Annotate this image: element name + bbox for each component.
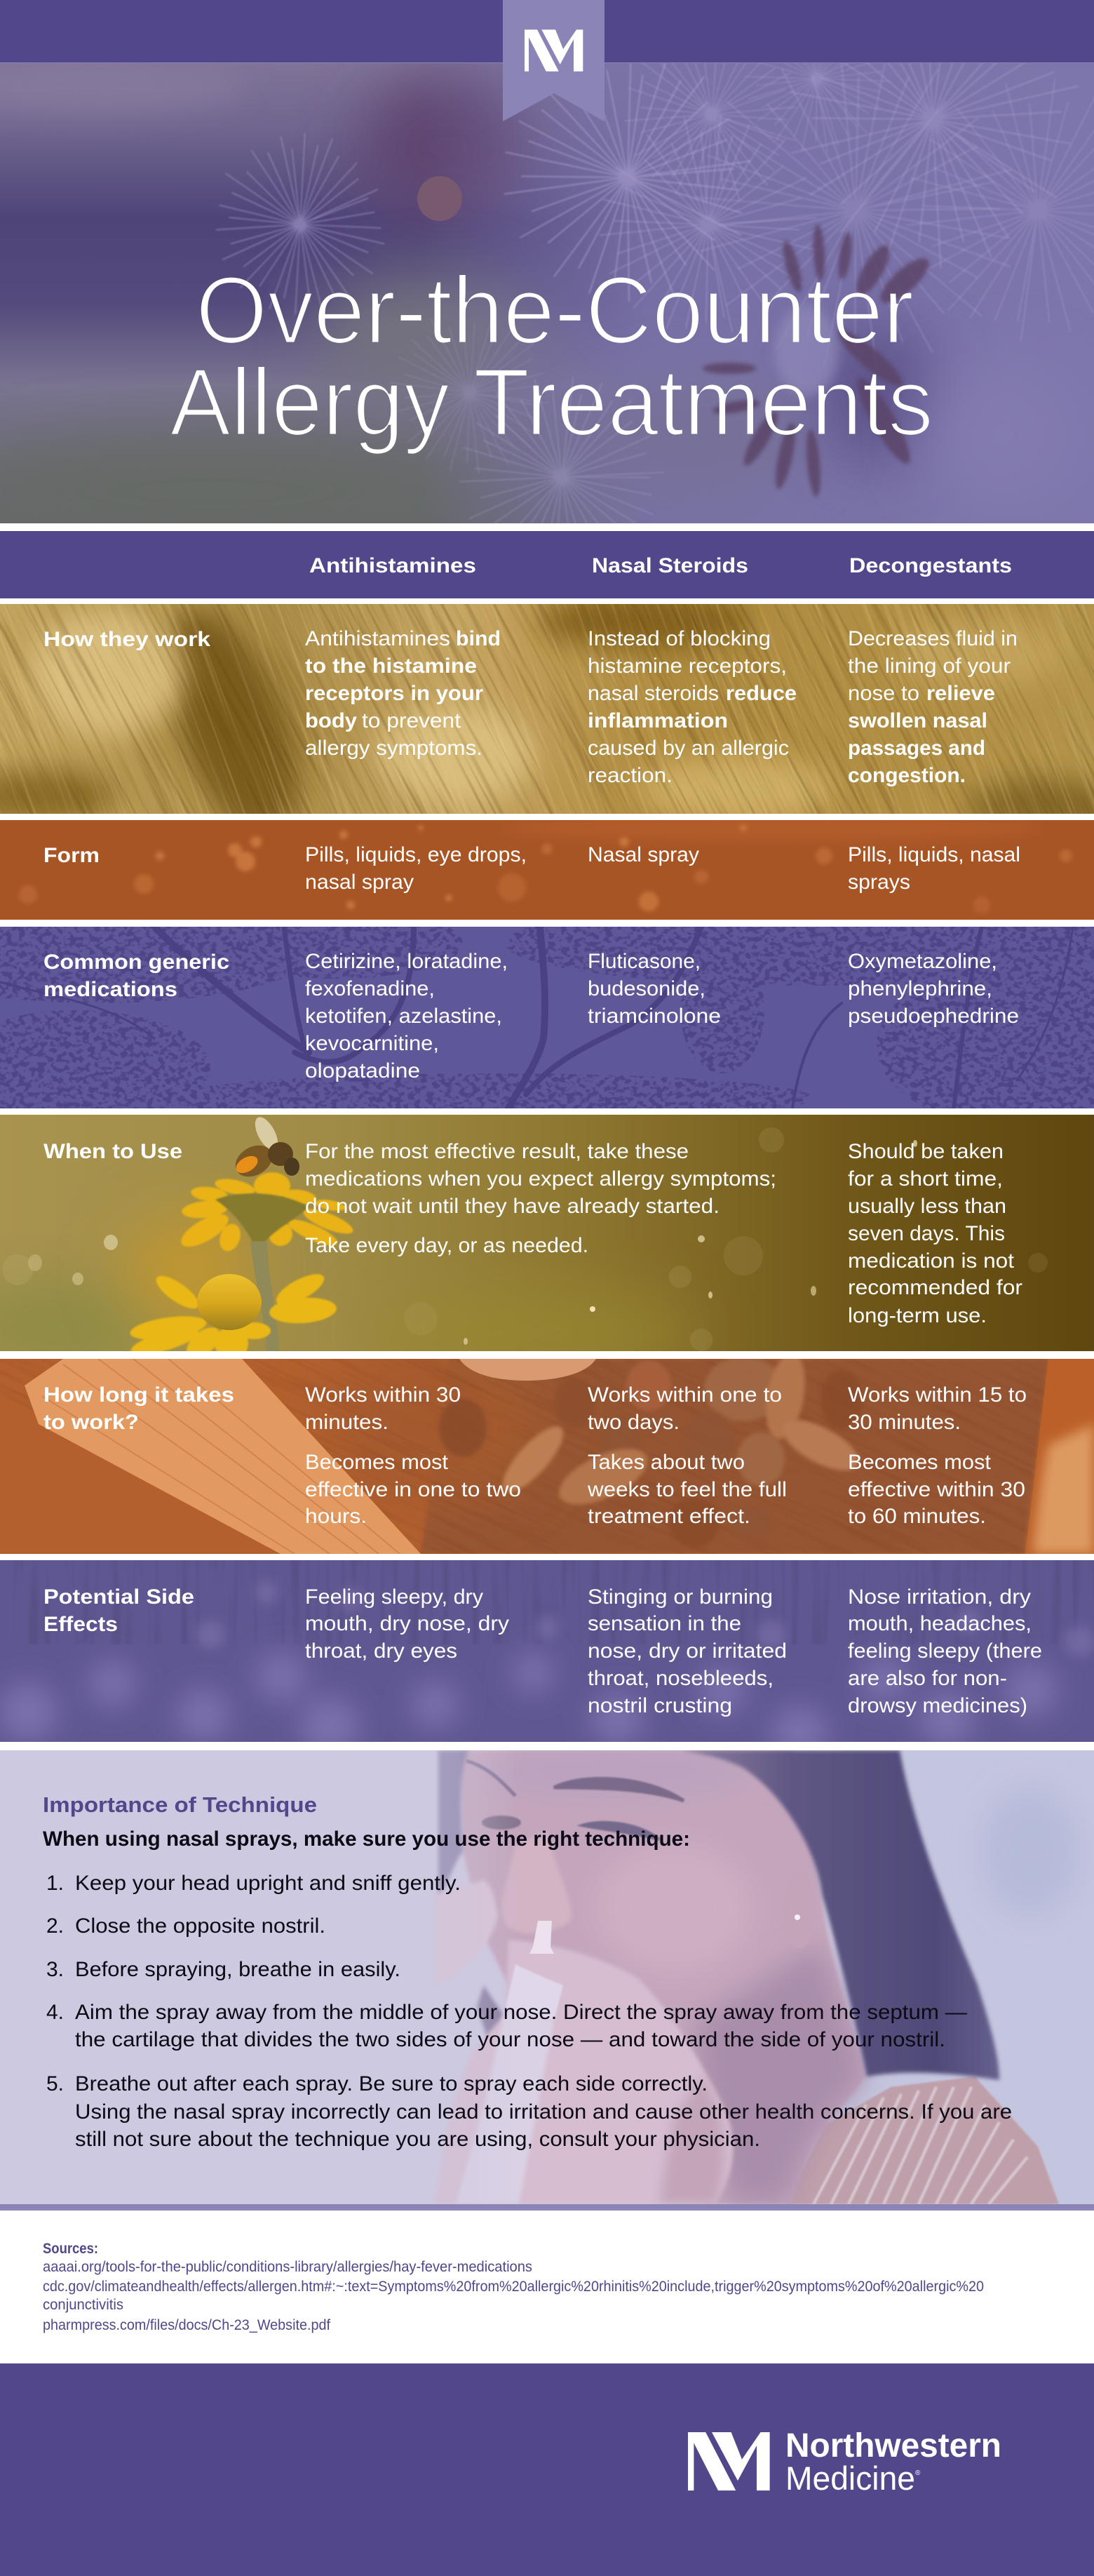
column: decongestants: sprays [848,871,910,894]
column: nasal steroids [588,1585,787,1717]
dandelion flower head [703,224,935,497]
nose [501,1831,572,1933]
bee [230,1113,299,1183]
column: decongestants: phenylephrine, [848,977,992,1000]
photo: purple dandelion field [0,1560,1094,1742]
ear [783,1871,816,1948]
column: decongestants: swollen nasal [848,709,987,732]
column: nasal steroids: Works within one to [588,1383,782,1407]
column: nasal steroids: reduce [726,682,797,705]
column: nasal steroids: Fluticasone, [588,950,701,973]
numbered steps: Aim the spray away from the middle of your nose. Direct the spray away from the septum — [75,2001,967,2024]
column: decongestants [848,1140,1022,1327]
header row [0,531,1094,598]
column: antihistamines: Pills, liquids, eye drops, [305,843,527,866]
column: antihistamines: kevocarnitine, [305,1032,439,1055]
column: antihistamines [305,627,501,760]
column: nasal steroids: Instead of blocking [588,627,771,650]
icon: Northwestern Medicine logo [688,2432,770,2490]
column: antihistamines [305,950,508,1082]
column: decongestants: 30 minutes. [848,1411,961,1434]
column: antihistamines [305,1383,521,1528]
column: decongestants: passages and [848,737,985,760]
photo: nuts on a wooden table [0,1359,1094,1554]
column: decongestants: medication is not [848,1249,1015,1273]
photo: purple trees [0,927,1094,1108]
stem [250,1242,279,1351]
text: antihistamines and nasal steroids: For the most effective result, take these [305,1140,689,1163]
column: nasal steroids: caused by an allergic [588,737,789,760]
numbered steps: Close the opposite nostril. [75,1914,325,1938]
subheading: When using nasal sprays, make sure you use the right technique: [43,1827,690,1851]
title: Over-the-Counter [196,257,914,363]
column: nasal steroids: sensation in the [588,1612,741,1635]
top band [0,0,1094,62]
header row: Decongestants [849,554,1012,577]
panel: how they work [0,0,1094,1762]
column: decongestants [848,843,1020,894]
panel: potential side effects [0,1560,1094,1761]
column: decongestants: Should be taken [848,1140,1004,1163]
wordmark [785,2427,1001,2497]
lower flower centre [197,1274,262,1330]
title: Allergy Treatments [170,349,933,455]
column: decongestants: Oxymetazoline, [848,950,997,973]
column: antihistamines [305,843,527,894]
text: antihistamines and nasal steroids: do not wait until they have already started. [305,1195,720,1218]
column: decongestants: Pills, liquids, nasal [848,843,1020,866]
upper flower [177,1172,356,1254]
right edge [1025,1359,1094,1554]
row label: Potential Side [43,1585,194,1609]
sources: Sources: [43,2241,98,2257]
sources: cdc.gov/climateandhealth/effects/allergen.htm#:~:text=Symptoms%20from%20allergic%20rhinitis%20include,trigger%20symptoms%20of%20allergic%20 [43,2279,984,2295]
column: antihistamines: bind [456,627,501,650]
column: nasal steroids: Stinging or burning [588,1585,773,1609]
hands and spray bottle [435,1880,733,2204]
column: antihistamines: fexofenadine, [305,977,435,1000]
column: antihistamines: to prevent [362,709,461,732]
column: antihistamines: effective in one to two [305,1478,521,1501]
panel: form [0,815,1094,920]
column: antihistamines: Works within 30 [305,1383,461,1407]
column: nasal steroids: throat, nosebleeds, [588,1667,774,1690]
column: nasal steroids [588,627,797,787]
column: decongestants: pseudoephedrine [848,1005,1019,1028]
column: antihistamines: hours. [305,1505,367,1528]
numbered steps: still not sure about the technique you are using, consult your physician. [75,2128,760,2151]
column: nasal steroids: nose, dry or irritated [588,1639,787,1663]
column: decongestants [848,950,1019,1028]
column: antihistamines: Becomes most [305,1451,449,1474]
column: decongestants [848,627,1018,787]
wordmark: ® [915,2469,921,2477]
column: antihistamines: nasal spray [305,871,414,894]
column: nasal steroids: weeks to feel the full [587,1478,787,1501]
numbered steps: Keep your head upright and sniff gently. [75,1872,461,1895]
column: nasal steroids: nasal steroids [588,682,719,705]
heading: Importance of Technique [43,1792,317,1817]
bowl [459,1359,596,1381]
row label: to work? [43,1411,139,1434]
column: antihistamines: to the histamine [305,655,477,678]
column: decongestants: congestion. [848,764,966,787]
lens flare [417,176,462,221]
row label: How they work [43,628,210,651]
numbered steps: 3. [46,1958,64,1981]
sources: conjunctivitis [43,2297,123,2313]
nuts [439,1350,866,1548]
dandelion seeds [216,0,1094,606]
text: antihistamines and nasal steroids: Take every day, or as needed. [305,1234,588,1257]
fade overlay [379,1750,519,2204]
text: antihistamines and nasal steroids: medications when you expect allergy symptoms; [305,1167,776,1190]
numbered steps: Breathe out after each spray. Be sure to spray each side correctly. [75,2072,708,2095]
skin [459,1747,866,2204]
column: decongestants: effective within 30 [848,1478,1025,1501]
header row: Antihistamines [309,554,476,577]
column: decongestants: usually less than [848,1195,1006,1218]
column: antihistamines: body [305,709,357,732]
numbered steps: the cartilage that divides the two sides of your nose — and toward the side of your nostril. [75,2028,945,2051]
text: antihistamines and nasal steroids [305,1140,776,1257]
column: decongestants: feeling sleepy (there [848,1639,1042,1663]
row label: Common generic [43,951,229,974]
title [170,257,933,455]
column: antihistamines: receptors in your [305,682,483,705]
photo: orange pollen bokeh [0,820,1094,920]
lower flower [128,1268,337,1364]
wordmark: Northwestern [785,2427,1001,2464]
column: antihistamines: Antihistamines [305,627,450,650]
column: antihistamines: olopatadine [305,1059,420,1082]
column: decongestants: for a short time, [848,1167,1003,1190]
photo: woman using nasal spray [0,1750,1094,2204]
numbered steps [46,1872,1012,2151]
row label: medications [43,978,177,1001]
column: antihistamines: ketotifen, azelastine, [305,1005,502,1028]
column: decongestants: Nose irritation, dry [848,1585,1031,1609]
column: nasal steroids: reaction. [588,764,673,787]
column: nasal steroids: treatment effect. [588,1505,750,1528]
row label: How long it takes [43,1383,234,1407]
numbered steps: 1. [46,1872,64,1895]
numbered steps: 4. [46,2001,64,2024]
column: antihistamines: mouth, dry nose, dry [305,1612,509,1635]
column: decongestants: recommended for [848,1276,1022,1299]
column: decongestants: seven days. This [848,1222,1005,1245]
panel: hero photo with dandelions [0,63,1094,523]
ribbon with logo [503,0,605,121]
column: decongestants: mouth, headaches, [848,1612,1032,1635]
column: decongestants: nose to [848,682,919,705]
numbered steps: Before spraying, breathe in easily. [75,1958,400,1981]
column: decongestants [848,1585,1042,1717]
photo: golden fur [0,604,1094,814]
shirt [785,2077,1059,2204]
column: decongestants: the lining of your [848,655,1011,678]
column: nasal steroids: triamcinolone [588,1005,721,1028]
column: nasal steroids [587,1383,787,1528]
column: nasal steroids: inflammation [588,709,728,732]
numbered steps: Using the nasal spray incorrectly can lead to irritation and cause other health concerns. If you are [75,2100,1012,2124]
row label: Form [43,844,100,867]
panel: common generic medications [0,891,1094,1129]
panel: when to use [0,1113,1094,1375]
column: nasal steroids: budesonide, [588,977,705,1000]
column: antihistamines: throat, dry eyes [305,1639,457,1663]
row label: When to Use [43,1140,182,1163]
column: decongestants: drowsy medicines) [848,1694,1027,1717]
bokeh dots [2,1127,1048,1351]
column: antihistamines: minutes. [305,1411,389,1434]
column: nasal steroids: Takes about two [588,1451,745,1474]
sources: pharmpress.com/files/docs/Ch-23_Website.pdf [43,2317,330,2333]
pasta bundle [25,1359,421,1554]
panel: importance of technique [0,1747,1094,2204]
numbered steps: 2. [46,1914,64,1938]
column: decongestants: to 60 minutes. [848,1505,986,1528]
column: decongestants: long-term use. [848,1304,987,1327]
row label [43,951,229,1001]
column: antihistamines: allergy symptoms. [305,737,482,760]
column: nasal steroids: histamine receptors, [588,655,787,678]
column: decongestants: Works within 15 to [848,1383,1027,1407]
icon: NM logo [525,29,583,72]
sources: aaaai.org/tools-for-the-public/conditions-library/allergies/hay-fever-medications [43,2259,532,2275]
row label [43,1585,194,1636]
header row: Nasal Steroids [592,554,748,577]
numbered steps: 5. [46,2072,64,2095]
column: antihistamines [305,1585,509,1663]
column: nasal steroids: nostril crusting [588,1694,732,1717]
eyes and eyebrows [466,1761,684,1839]
column: nasal steroids [588,950,721,1028]
column: decongestants: are also for non- [848,1667,1007,1690]
footer band [0,2363,1094,2576]
column: decongestants: Decreases fluid in [848,627,1018,650]
column: nasal steroids: two days. [588,1411,680,1434]
hair [438,1750,999,2080]
column: antihistamines: Cetirizine, loratadine, [305,950,508,973]
sources [43,2241,984,2333]
row label [43,1383,234,1434]
photo: bee on yellow flowers [0,1115,1094,1351]
column: antihistamines: Feeling sleepy, dry [305,1585,483,1609]
column: decongestants: Becomes most [848,1451,992,1474]
column: nasal steroids: Nasal spray [588,843,699,866]
flower calyx [215,1193,309,1242]
panel: how long it takes [0,0,1094,1896]
row label: Effects [43,1613,118,1636]
column: decongestants: relieve [926,682,995,705]
wordmark: Medicine [785,2460,915,2497]
column: decongestants [848,1383,1027,1528]
